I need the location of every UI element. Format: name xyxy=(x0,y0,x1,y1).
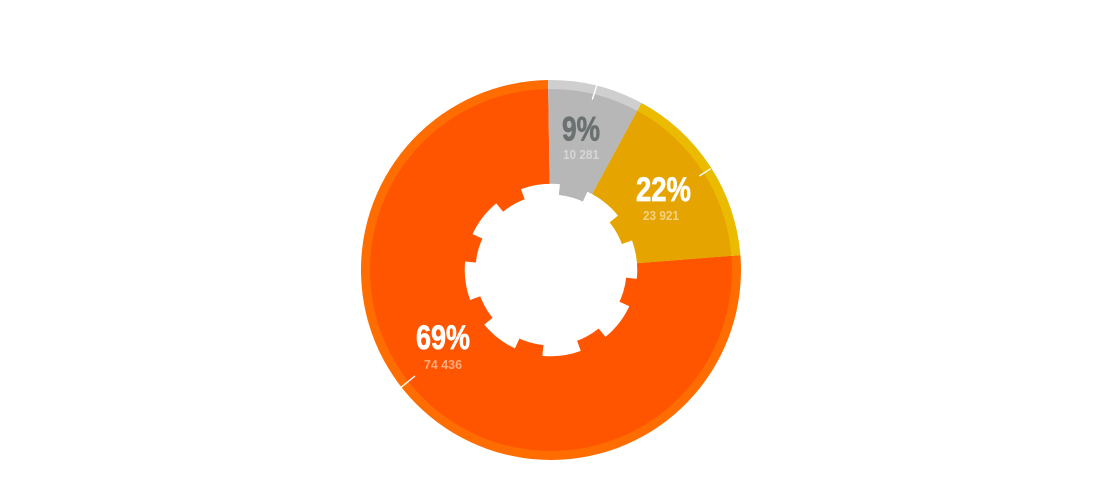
label: 69% xyxy=(416,319,470,372)
label: 22% xyxy=(636,171,691,223)
label: 9%: 9% xyxy=(562,110,600,148)
label: 69%: 74 436 xyxy=(424,357,462,372)
toothed centre hole xyxy=(448,167,654,373)
label: 69%: 69% xyxy=(416,319,470,357)
label: 22%: 23 921 xyxy=(643,208,679,223)
segment: grey 9% xyxy=(548,80,641,270)
segment: orange 69% xyxy=(361,80,741,460)
label: 22%: 22% xyxy=(636,171,691,209)
label: 9% xyxy=(562,110,600,162)
segment: yellow 22% xyxy=(551,103,740,270)
label: 9%: 10 281 xyxy=(563,147,599,162)
